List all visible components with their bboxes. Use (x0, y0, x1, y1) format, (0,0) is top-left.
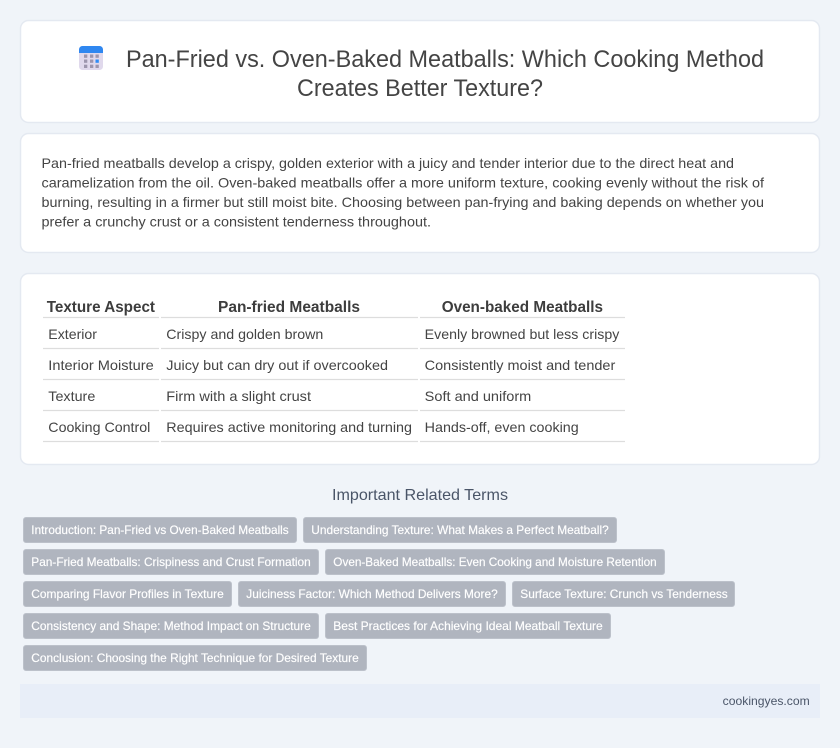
table row: cooking control (48, 419, 579, 435)
table row: cooking control: Hands-off, even cooking (425, 419, 579, 435)
table header: Pan-fried Meatballs (218, 299, 360, 316)
table row: cooking control: Cooking Control (48, 419, 150, 435)
table row: texture (48, 388, 531, 404)
table row: texture: Soft and uniform (425, 388, 531, 404)
tag: juiciness factor: Juiciness Factor: Which Method Delivers More? (246, 587, 498, 601)
tag: juiciness factor (238, 582, 506, 606)
icon: calendar (79, 46, 103, 70)
tag: introduction: Introduction: Pan-Fried vs Oven-Baked Meatballs (31, 523, 289, 537)
table row: interior moisture: Juicy but can dry out if overcooked (166, 357, 388, 373)
text block: introduction: caramelization from the oil. Oven-baked meatballs offer a more uniform texture, cooking evenly without the risk of (42, 174, 764, 190)
text block: introduction: prefer a crunchy crust or a consistent tenderness throughout. (42, 214, 431, 230)
footer (20, 684, 820, 718)
tag: oven-baked even cooking (326, 550, 664, 574)
tag: conclusion (24, 646, 366, 670)
table row: exterior (48, 326, 619, 342)
tag: flavor profiles (24, 582, 232, 606)
tag: best practices: Best Practices for Achieving Ideal Meatball Texture (333, 619, 603, 633)
table row: interior moisture (48, 357, 616, 373)
tag: introduction (24, 518, 296, 542)
table row: interior moisture: Consistently moist and tender (425, 357, 616, 373)
table header: Texture Aspect (47, 299, 156, 316)
tag: flavor profiles: Comparing Flavor Profiles in Texture (31, 587, 224, 601)
table header (47, 299, 603, 316)
tag: consistency and shape (24, 614, 318, 638)
related term tags (24, 518, 734, 670)
title (126, 46, 764, 102)
table row: interior moisture: Interior Moisture (48, 357, 154, 373)
text block: introduction: Pan-fried meatballs develop a crispy, golden exterior with a juicy and tender interior due to the direct heat and (42, 155, 734, 171)
heading: important related terms: Important Related Terms (332, 487, 508, 504)
title: Creates Better Texture? (297, 75, 543, 102)
tag: oven-baked even cooking: Oven-Baked Meatballs: Even Cooking and Moisture Retention (333, 555, 657, 569)
text block: introduction: burning, resulting in a firmer but still moist bite. Choosing between pan-frying and baking depends on whether you (42, 194, 764, 210)
footer source text: cookingyes.com (723, 694, 810, 708)
tag: surface texture (512, 582, 734, 606)
tag: consistency and shape: Consistency and Shape: Method Impact on Structure (31, 619, 311, 633)
table row: texture: Firm with a slight crust (166, 388, 311, 404)
table row: cooking control: Requires active monitoring and turning (166, 419, 412, 435)
table row: exterior: Crispy and golden brown (166, 326, 323, 342)
tag: pan-fried crispiness (24, 550, 318, 574)
panel: introduction (20, 134, 820, 252)
tag: conclusion: Conclusion: Choosing the Right Technique for Desired Texture (31, 651, 359, 665)
table row: exterior: Exterior (48, 326, 97, 342)
tag: best practices (326, 614, 610, 638)
table row: exterior: Evenly browned but less crispy (425, 326, 619, 342)
table header: Oven-baked Meatballs (442, 299, 603, 316)
panel: title (20, 20, 820, 122)
tag: pan-fried crispiness: Pan-Fried Meatballs: Crispiness and Crust Formation (31, 555, 311, 569)
table row: texture: Texture (48, 388, 96, 404)
tag: surface texture: Surface Texture: Crunch vs Tenderness (520, 587, 728, 601)
panel: comparison table (20, 274, 820, 464)
tag: understanding texture (304, 518, 616, 542)
title: Pan-Fried vs. Oven-Baked Meatballs: Which Cooking Method (126, 46, 764, 73)
tag: understanding texture: Understanding Texture: What Makes a Perfect Meatball? (311, 523, 609, 537)
text block: introduction (42, 155, 764, 230)
